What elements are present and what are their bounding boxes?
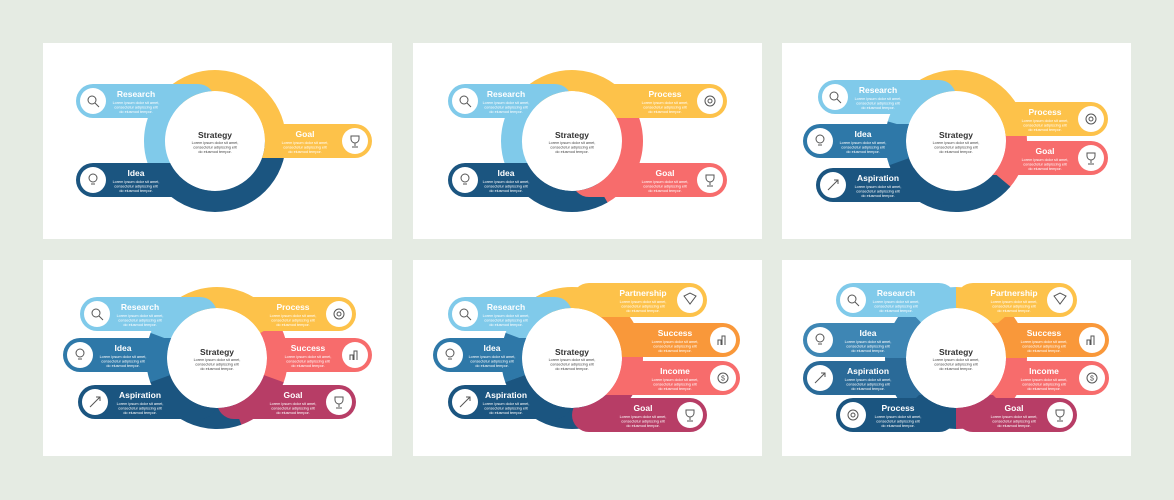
tab: Research [836, 283, 956, 317]
tab: Goal: Lorem ipsum dolor sit amet, [1022, 158, 1068, 162]
tab: Success: Lorem ipsum dolor sit amet, [1021, 340, 1067, 344]
tab: Process: consectetur adipiscing elit [643, 106, 688, 110]
center text: Strategy [549, 347, 595, 371]
center text: Strategy [933, 347, 979, 371]
center text: Strategy [933, 130, 979, 154]
tab: Success: Success [658, 328, 693, 338]
center text: Strategy: Strategy [939, 347, 973, 357]
tab: Process: consectetur adipiscing elit [271, 318, 316, 322]
tab: Success: do eiusmod tempor. [658, 349, 692, 353]
tab: Goal: do eiusmod tempor. [276, 411, 310, 415]
tab: Research: consectetur adipiscing elit [118, 318, 163, 322]
tab: Idea: Lorem ipsum dolor sit amet, [845, 340, 891, 344]
tab: Process: do eiusmod tempor. [881, 424, 915, 428]
center text: Strategy: Strategy [200, 347, 234, 357]
panel 5 [413, 260, 762, 456]
tab: Research: Research [487, 302, 525, 312]
tab: Income [606, 361, 740, 395]
tab: Idea [803, 124, 909, 158]
center text: Strategy: Lorem ipsum dolor sit amet, [549, 358, 595, 362]
tab: Goal: Goal [656, 168, 674, 178]
tab: Research: Research [487, 89, 525, 99]
tab: Aspiration: consectetur adipiscing elit [856, 190, 901, 194]
tab: Process: do eiusmod tempor. [276, 323, 310, 327]
tab: Success: do eiusmod tempor. [291, 364, 325, 368]
tab: Goal: consectetur adipiscing elit [1023, 162, 1068, 166]
tab: Idea: Lorem ipsum dolor sit amet, [469, 355, 515, 359]
tab: Partnership: do eiusmod tempor. [626, 309, 660, 313]
tab: Idea [448, 163, 572, 197]
ring [487, 56, 657, 226]
panel 4 [43, 260, 392, 456]
tab: Aspiration [803, 361, 922, 395]
tab: Partnership: consectetur adipiscing elit [621, 304, 666, 308]
ring [870, 272, 1042, 444]
tab: Success: Success [1027, 328, 1062, 338]
tab: Idea: Idea [497, 168, 515, 178]
tab: Idea: do eiusmod tempor. [489, 189, 523, 193]
tab: Process: Process [276, 302, 310, 312]
tab: Goal: consectetur adipiscing elit [283, 146, 328, 150]
center text: Strategy: consectetur adipiscing elit [934, 362, 979, 366]
tab: Idea: do eiusmod tempor. [119, 189, 153, 193]
panel 6 [782, 260, 1131, 456]
tab: Goal: do eiusmod tempor. [1028, 167, 1062, 171]
tab: Goal: do eiusmod tempor. [997, 424, 1031, 428]
tab: Aspiration: do eiusmod tempor. [489, 411, 523, 415]
tab: Income: do eiusmod tempor. [658, 387, 692, 391]
tab: Goal: consectetur adipiscing elit [271, 406, 316, 410]
tab: Aspiration: consectetur adipiscing elit [484, 406, 529, 410]
ring [871, 56, 1041, 226]
tab: Goal: do eiusmod tempor. [648, 189, 682, 193]
tab: Research: consectetur adipiscing elit [874, 304, 919, 308]
center text: Strategy: Lorem ipsum dolor sit amet, [933, 358, 979, 362]
center text: Strategy [194, 347, 240, 371]
tab: Process: Lorem ipsum dolor sit amet, [642, 101, 688, 105]
tab: Process: do eiusmod tempor. [1028, 128, 1062, 132]
tab: Process: consectetur adipiscing elit [1023, 124, 1068, 128]
tab: Research: Lorem ipsum dolor sit amet, [483, 101, 529, 105]
center text: Strategy: Strategy [555, 347, 589, 357]
center text: Strategy: consectetur adipiscing elit [550, 362, 595, 366]
tab: Idea [76, 163, 215, 197]
tab: Process: Lorem ipsum dolor sit amet, [270, 314, 316, 318]
tab: Aspiration: do eiusmod tempor. [123, 411, 157, 415]
tab: Goal [572, 163, 727, 197]
tab: Research: Research [117, 89, 155, 99]
tab: Success: consectetur adipiscing elit [653, 344, 698, 348]
tab: Idea: do eiusmod tempor. [851, 349, 885, 353]
center text: Strategy: do eiusmod tempor. [939, 150, 973, 154]
tab: Income: Income [1029, 366, 1059, 376]
tab: Goal: Goal [284, 390, 302, 400]
tab: Aspiration: Lorem ipsum dolor sit amet, [845, 378, 891, 382]
ring [133, 274, 301, 442]
tab: Idea: consectetur adipiscing elit [101, 360, 146, 364]
tab: Idea: do eiusmod tempor. [475, 364, 509, 368]
tab: Process [572, 84, 727, 118]
center text: Strategy: Lorem ipsum dolor sit amet, [194, 358, 240, 362]
tab: Idea: Idea [127, 168, 145, 178]
tab: Process: Process [881, 403, 915, 413]
tab: Goal: Goal [1005, 403, 1023, 413]
center text: Strategy: do eiusmod tempor. [555, 150, 589, 154]
tab: Aspiration: do eiusmod tempor. [861, 194, 895, 198]
center text: Strategy: Lorem ipsum dolor sit amet, [549, 141, 595, 145]
center text: Strategy: Lorem ipsum dolor sit amet, [933, 141, 979, 145]
tab: Research: Lorem ipsum dolor sit amet, [113, 101, 159, 105]
tab: Goal: consectetur adipiscing elit [992, 420, 1037, 424]
tab: Research: do eiusmod tempor. [861, 106, 895, 110]
tab: Research [818, 80, 956, 114]
tab: Goal: Lorem ipsum dolor sit amet, [991, 415, 1037, 419]
tab: Research [448, 297, 572, 331]
tab: Partnership [572, 283, 707, 317]
tab: Process: Process [648, 89, 682, 99]
tab: Research: Lorem ipsum dolor sit amet, [855, 97, 901, 101]
ring [489, 275, 655, 441]
tab: Partnership: do eiusmod tempor. [997, 309, 1031, 313]
tab: Goal: Lorem ipsum dolor sit amet, [282, 141, 328, 145]
tab: Idea: consectetur adipiscing elit [470, 360, 515, 364]
tab: Aspiration [816, 168, 956, 202]
tab: Process: Lorem ipsum dolor sit amet, [875, 415, 921, 419]
tab: Income: consectetur adipiscing elit [1022, 382, 1067, 386]
panel 3 [782, 43, 1131, 239]
tab: Success [262, 338, 372, 372]
tab: Partnership: Lorem ipsum dolor sit amet, [620, 300, 666, 304]
tab: Research: do eiusmod tempor. [123, 323, 157, 327]
tab: Process: Process [1028, 107, 1062, 117]
center text: Strategy [549, 130, 595, 154]
center text: Strategy: Strategy [198, 130, 232, 140]
tab: Idea [433, 338, 526, 372]
tab: Research: do eiusmod tempor. [879, 309, 913, 313]
tab: Aspiration: do eiusmod tempor. [851, 387, 885, 391]
tab: Aspiration [78, 385, 217, 419]
center text: Strategy: Lorem ipsum dolor sit amet, [192, 141, 238, 145]
tab: Success: Success [291, 343, 326, 353]
tab: Research: Lorem ipsum dolor sit amet, [873, 300, 919, 304]
tab: Process [987, 102, 1108, 136]
tab: Research: Lorem ipsum dolor sit amet, [483, 314, 529, 318]
tab: Partnership [956, 283, 1077, 317]
tab: Idea: Idea [854, 129, 872, 139]
ring [130, 56, 300, 226]
tab: Income [990, 361, 1109, 395]
tab: Research: Lorem ipsum dolor sit amet, [117, 314, 163, 318]
tab: Goal: do eiusmod tempor. [288, 150, 322, 154]
tab: Aspiration: consectetur adipiscing elit [118, 406, 163, 410]
tab: Success [992, 323, 1109, 357]
center text: Strategy: consectetur adipiscing elit [193, 146, 238, 150]
tab: Income: consectetur adipiscing elit [653, 382, 698, 386]
tab: Aspiration: Aspiration [485, 390, 527, 400]
tab: Goal [572, 398, 707, 432]
tab: Research: consectetur adipiscing elit [484, 106, 529, 110]
tab: Idea [63, 338, 172, 372]
center text: Strategy: do eiusmod tempor. [939, 367, 973, 371]
tab: Aspiration: consectetur adipiscing elit [846, 382, 891, 386]
tab: Aspiration: Lorem ipsum dolor sit amet, [483, 402, 529, 406]
tab: Success [608, 323, 740, 357]
tab: Aspiration: Lorem ipsum dolor sit amet, [855, 185, 901, 189]
tab: Research: do eiusmod tempor. [489, 110, 523, 114]
tab: Partnership: Partnership [990, 288, 1038, 298]
tab: Goal [956, 398, 1077, 432]
tab: Goal: do eiusmod tempor. [626, 424, 660, 428]
panel 2 [413, 43, 762, 239]
tab: Success: consectetur adipiscing elit [286, 360, 331, 364]
tab: Idea: Idea [114, 343, 132, 353]
tab: Research: consectetur adipiscing elit [856, 102, 901, 106]
center text: Strategy: do eiusmod tempor. [555, 367, 589, 371]
tab: Goal: consectetur adipiscing elit [643, 184, 688, 188]
center text: Strategy [192, 130, 238, 154]
panel 1 [43, 43, 392, 239]
tab: Aspiration: Aspiration [847, 366, 889, 376]
center text: Strategy: consectetur adipiscing elit [934, 146, 979, 150]
tab: Idea: do eiusmod tempor. [846, 150, 880, 154]
tab: Income: do eiusmod tempor. [1027, 387, 1061, 391]
tab: Aspiration [448, 385, 572, 419]
center text: Strategy: do eiusmod tempor. [198, 150, 232, 154]
tab: Income: $ [721, 376, 725, 382]
tab: Goal: consectetur adipiscing elit [621, 420, 666, 424]
tab: Idea: do eiusmod tempor. [106, 364, 140, 368]
tab: Research [76, 84, 215, 118]
center text: Strategy: Strategy [939, 130, 973, 140]
tab: Research [80, 297, 217, 331]
tab: Success: do eiusmod tempor. [1027, 349, 1061, 353]
tab: Idea: Idea [483, 343, 501, 353]
tab: Success: Lorem ipsum dolor sit amet, [652, 340, 698, 344]
tab: Research: consectetur adipiscing elit [114, 106, 159, 110]
tab: Goal [992, 141, 1108, 175]
tab: Income: Lorem ipsum dolor sit amet, [1021, 378, 1067, 382]
tab: Idea: consectetur adipiscing elit [114, 184, 159, 188]
tab: Research [448, 84, 572, 118]
tab: Income: Lorem ipsum dolor sit amet, [652, 378, 698, 382]
tab: Income: $ [1090, 376, 1094, 382]
tab: Aspiration: Aspiration [857, 173, 899, 183]
tab: Partnership: consectetur adipiscing elit [992, 304, 1037, 308]
tab: Aspiration: Aspiration [119, 390, 161, 400]
tab: Process [217, 297, 356, 331]
center text: Strategy: Strategy [555, 130, 589, 140]
tab: Idea: consectetur adipiscing elit [846, 344, 891, 348]
tab: Goal: Goal [634, 403, 652, 413]
tab: Goal: Lorem ipsum dolor sit amet, [642, 180, 688, 184]
center text: Strategy: consectetur adipiscing elit [550, 146, 595, 150]
center text: Strategy: consectetur adipiscing elit [195, 362, 240, 366]
tab: Success: consectetur adipiscing elit [1022, 344, 1067, 348]
tab: Research: consectetur adipiscing elit [484, 318, 529, 322]
tab: Research: Research [121, 302, 159, 312]
tab: Idea: consectetur adipiscing elit [484, 184, 529, 188]
tab: Aspiration: Lorem ipsum dolor sit amet, [117, 402, 163, 406]
tab: Idea: Lorem ipsum dolor sit amet, [100, 355, 146, 359]
tab: Idea: consectetur adipiscing elit [841, 146, 886, 150]
tab: Goal [217, 385, 356, 419]
tab: Goal: Goal [296, 129, 314, 139]
tab: Idea: Idea [859, 328, 877, 338]
tab: Income: Income [660, 366, 690, 376]
tab: Process: Lorem ipsum dolor sit amet, [1022, 119, 1068, 123]
tab: Process [836, 398, 956, 432]
tab: Research: do eiusmod tempor. [489, 323, 523, 327]
tab: Success: Lorem ipsum dolor sit amet, [285, 355, 331, 359]
tab: Goal: Lorem ipsum dolor sit amet, [620, 415, 666, 419]
tab: Idea: Lorem ipsum dolor sit amet, [840, 141, 886, 145]
center text: Strategy: do eiusmod tempor. [200, 367, 234, 371]
tab: Goal: Lorem ipsum dolor sit amet, [270, 402, 316, 406]
tab: Partnership: Partnership [619, 288, 667, 298]
tab: Process: consectetur adipiscing elit [876, 420, 921, 424]
tab: Partnership: Lorem ipsum dolor sit amet, [991, 300, 1037, 304]
tab: Research: do eiusmod tempor. [119, 110, 153, 114]
tab: Idea: Lorem ipsum dolor sit amet, [483, 180, 529, 184]
tab: Goal [262, 124, 372, 158]
tab: Idea: Lorem ipsum dolor sit amet, [113, 180, 159, 184]
tab: Goal: Goal [1036, 146, 1054, 156]
tab: Process: do eiusmod tempor. [648, 110, 682, 114]
tab: Research: Research [859, 85, 897, 95]
tab: Research: Research [877, 288, 915, 298]
tab: Idea [803, 323, 920, 357]
